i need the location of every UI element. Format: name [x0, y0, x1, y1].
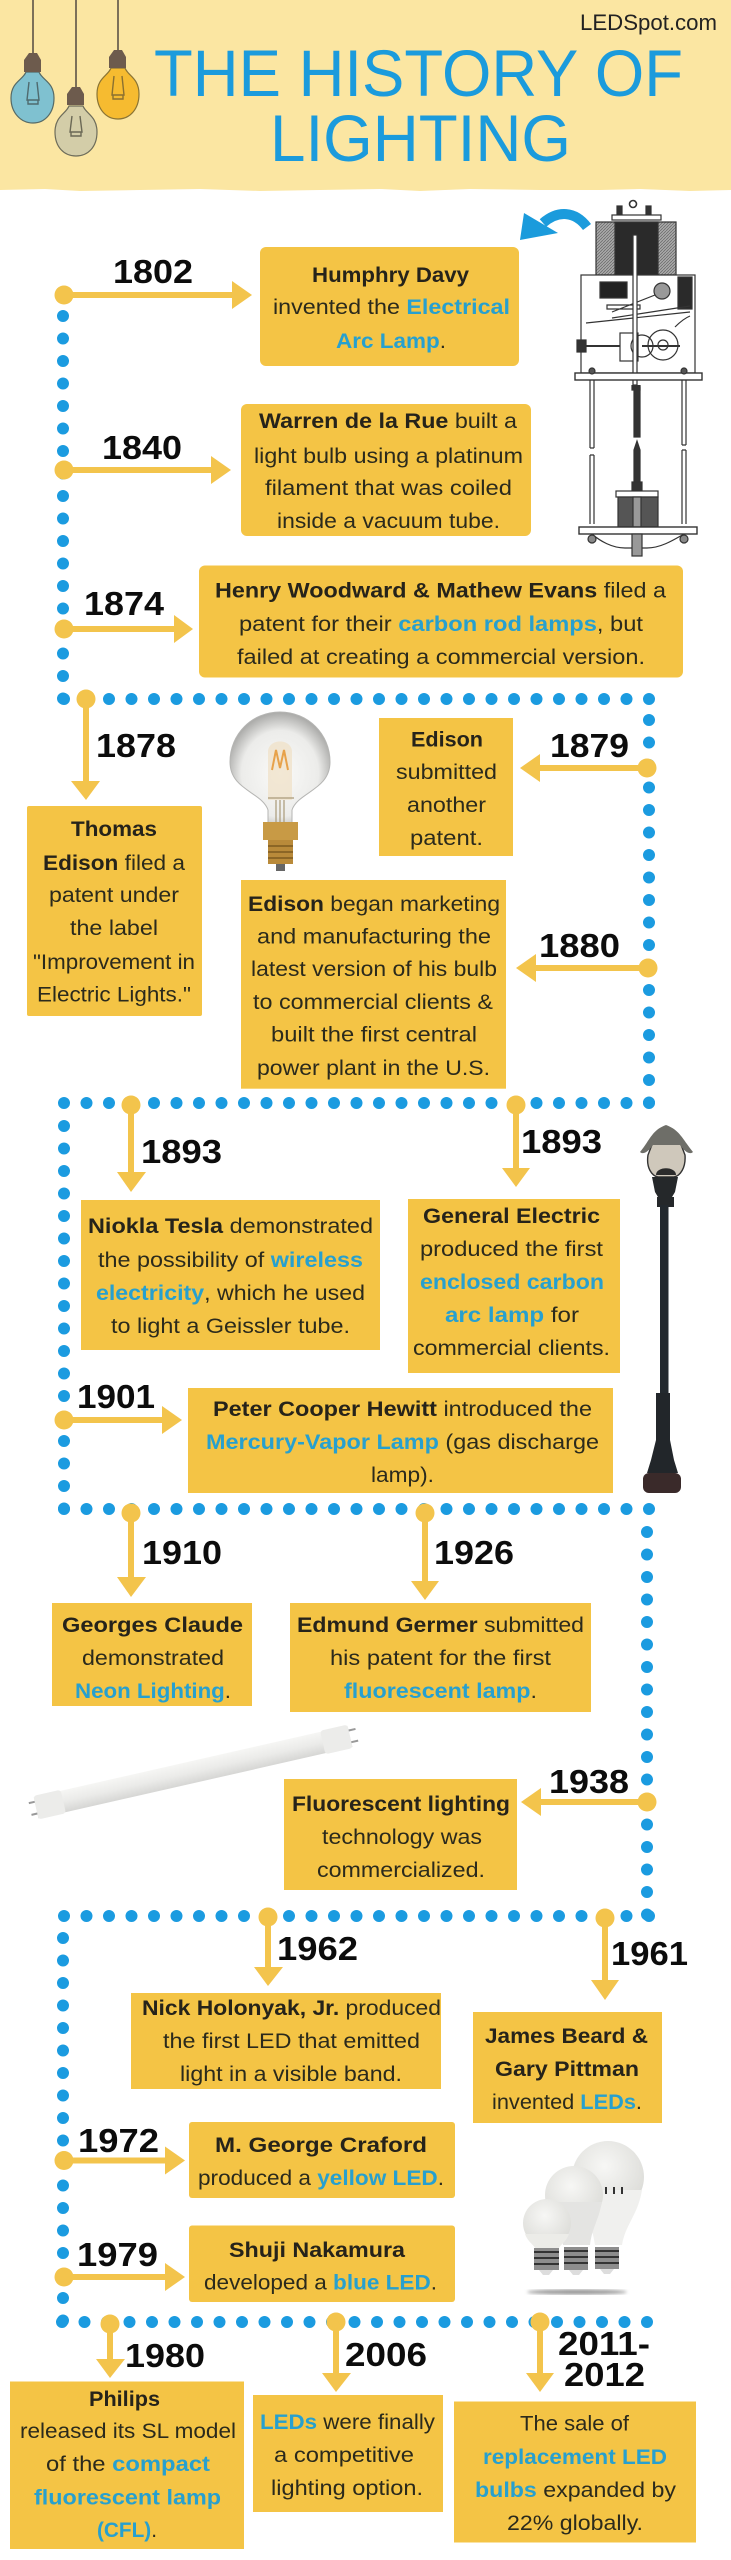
text box: Philips [89, 2388, 160, 2411]
year: 1972 [78, 2122, 159, 2159]
arrow [411, 1504, 439, 1600]
year: 1840 [102, 429, 182, 466]
text box: (CFL). [97, 2519, 157, 2542]
year: 1962 [277, 1930, 358, 1967]
text box: invented LEDs. [492, 2091, 642, 2114]
text box: Arc Lamp . [336, 330, 446, 353]
arrow [54, 2263, 185, 2291]
text box: of the compact [46, 2453, 210, 2476]
event 1840 [54, 404, 531, 536]
text box: Gary Pittman [495, 2058, 639, 2081]
text box: "Improvement in [33, 951, 195, 974]
text box: built the first central [271, 1024, 477, 1046]
text box: bulbs expanded by [475, 2479, 677, 2502]
text box: his patent for the first [330, 1647, 551, 1670]
event 1880 [241, 880, 658, 1089]
year: 1926 [434, 1534, 514, 1571]
title [154, 36, 683, 175]
text box [131, 1993, 441, 2089]
event 1926 [290, 1504, 591, 1712]
text box [284, 1779, 517, 1890]
text box [454, 2402, 696, 2542]
text box: Edmund Germer submitted [297, 1614, 584, 1637]
arrow [71, 690, 100, 800]
title: THE HISTORY OF [154, 36, 683, 110]
arrow [54, 1406, 182, 1434]
arrow [591, 1908, 619, 2000]
year: 1910 [142, 1534, 222, 1571]
text box: Thomas [71, 818, 157, 841]
text box: commercialized. [317, 1859, 485, 1882]
arrow [117, 1504, 146, 1597]
event 1962 [131, 1908, 441, 2089]
text box: Mercury-Vapor Lamp (gas discharge [206, 1431, 599, 1454]
text box [189, 2122, 455, 2198]
text box [253, 2395, 443, 2512]
event 1961 [473, 1908, 688, 2123]
arrow [516, 954, 658, 982]
year: 2006 [345, 2336, 427, 2373]
text box: invented the Electrical [273, 296, 510, 319]
icon: arc lamp apparatus [575, 200, 702, 556]
text box: a competitive [274, 2444, 414, 2467]
year: 2012 [564, 2356, 645, 2393]
arrow [117, 1096, 146, 1192]
year: 1938 [549, 1763, 629, 1800]
text box: to light a Geissler tube. [111, 1315, 350, 1338]
dotted timeline path [62, 316, 650, 2322]
text box: Shuji Nakamura [229, 2239, 405, 2262]
text box: latest version of his bulb [251, 958, 497, 981]
text box: patent under [49, 884, 179, 907]
event 1893 Tesla [81, 1096, 380, 1350]
year: 1880 [539, 927, 620, 964]
year: 1893 [521, 1123, 602, 1160]
arrow [54, 2146, 185, 2174]
header banner [0, 0, 731, 191]
year: 1901 [77, 1378, 155, 1415]
arrow [520, 754, 656, 782]
text box [10, 2382, 244, 2549]
text box: Warren de la Rue built a [259, 410, 517, 433]
icon: blue bulb [11, 0, 54, 123]
text box: Edison began marketing [248, 893, 500, 916]
year: 2011- [558, 2325, 650, 2362]
text box: Neon Lighting . [75, 1680, 231, 1703]
event 1980 [10, 2314, 244, 2549]
text box: the label [70, 917, 158, 940]
text box [52, 1603, 252, 1706]
text box: released its SL model [20, 2420, 236, 2443]
text box: electricity , which he used [96, 1282, 365, 1305]
text box [379, 718, 513, 856]
text box: Henry Woodward & Mathew Evans filed a [215, 580, 666, 602]
event 1938 [284, 1763, 656, 1890]
text box: to commercial clients & [253, 991, 493, 1014]
text box: fluorescent lamp [34, 2486, 221, 2510]
text box: 22% globally. [507, 2512, 643, 2535]
text box [199, 566, 683, 678]
icon: curved blue arrow [520, 213, 587, 240]
text box: demonstrated [82, 1647, 224, 1670]
text box: produced a yellow LED . [198, 2167, 444, 2190]
arrow [322, 2312, 351, 2392]
year: 1980 [125, 2337, 205, 2374]
year: 1874 [84, 585, 165, 622]
text box: lamp). [371, 1464, 434, 1487]
event 1893 General Electric [408, 1096, 620, 1373]
event 1878 [27, 690, 202, 1016]
arrow [521, 1788, 656, 1816]
arrow [54, 615, 193, 643]
text box: LEDs were finally [260, 2411, 436, 2434]
text box [290, 1603, 591, 1712]
medium bulb [545, 2166, 603, 2275]
event 1972 [54, 2122, 455, 2198]
event 1901 [54, 1378, 613, 1493]
text box: light bulb using a platinum [254, 445, 523, 468]
icon: hanging bulbs [11, 0, 139, 156]
text box: failed at creating a commercial version. [237, 646, 645, 669]
text box: the first LED that emitted [163, 2030, 420, 2053]
text box [241, 880, 506, 1089]
text box: arc lamp for [445, 1304, 579, 1327]
icon: grey bulb [55, 0, 97, 156]
small bulb [523, 2199, 571, 2275]
text box: Peter Cooper Hewitt introduced the [213, 1398, 592, 1421]
text box [241, 404, 531, 536]
text box: replacement LED [483, 2446, 667, 2469]
text box [408, 1199, 620, 1373]
event 1910 [52, 1504, 252, 1706]
text box: light in a visible band. [180, 2063, 402, 2086]
year: 1961 [611, 1935, 688, 1972]
text box: technology was [322, 1826, 482, 1849]
text box: M. George Craford [215, 2134, 427, 2157]
text box: Electric Lights." [37, 984, 191, 1006]
text box: developed a blue LED . [204, 2272, 437, 2294]
site name: LEDSpot.com [580, 10, 717, 35]
year: 1893 [141, 1133, 222, 1170]
event 1879 [379, 718, 656, 856]
text box [188, 1388, 613, 1493]
text box: The sale of [520, 2412, 629, 2436]
event 1874 [54, 566, 683, 678]
text box: General Electric [423, 1205, 600, 1228]
text box: Niokla Tesla demonstrated [88, 1215, 373, 1238]
event 1979 [54, 2226, 455, 2302]
title: LIGHTING [270, 101, 571, 175]
text box: Fluorescent lighting [292, 1793, 510, 1816]
text box: Humphry Davy [312, 264, 469, 287]
text box: fluorescent lamp . [344, 1680, 537, 1703]
text box: and manufacturing the [257, 926, 491, 948]
text box [189, 2226, 455, 2302]
text box: patent for their carbon rod lamps , but [239, 613, 643, 636]
year: 1879 [550, 727, 629, 764]
text box: Nick Holonyak, Jr. produced [142, 1997, 441, 2020]
event 2006 [253, 2312, 443, 2512]
arrow [96, 2314, 125, 2378]
year: 1979 [77, 2236, 158, 2273]
text box: another [407, 794, 486, 817]
text box: enclosed carbon [420, 1271, 604, 1294]
text box: power plant in the U.S. [257, 1057, 490, 1080]
year: 1878 [96, 727, 176, 764]
text box: Georges Claude [62, 1614, 243, 1637]
large bulb [572, 2141, 644, 2274]
text box: filament that was coiled [265, 477, 512, 500]
icon: street lamp post [640, 1125, 693, 1493]
text box [27, 806, 202, 1016]
arrow [254, 1908, 283, 1986]
text box: submitted [396, 761, 497, 784]
text box: lighting option. [271, 2477, 423, 2500]
year: 1802 [113, 253, 193, 290]
text box [260, 247, 519, 366]
text box [473, 2012, 662, 2123]
text box: the possibility of wireless [98, 1249, 363, 1272]
arrow [502, 1096, 530, 1187]
text box: patent. [410, 827, 483, 850]
arrow [54, 281, 252, 309]
year [558, 2325, 650, 2393]
text box: produced the first [420, 1238, 603, 1261]
text box: Edison [411, 728, 483, 752]
arrow [54, 456, 231, 484]
icon: fluorescent tube [27, 1723, 359, 1821]
icon: LED bulbs [523, 2141, 644, 2294]
text box [81, 1200, 380, 1350]
text box: Edison filed a [43, 852, 185, 875]
text box: James Beard & [485, 2025, 648, 2048]
text box: commercial clients. [413, 1337, 610, 1360]
text box: inside a vacuum tube. [277, 510, 500, 533]
arrow [526, 2312, 554, 2392]
icon: yellow bulb [97, 0, 139, 119]
event 2011-2012 [454, 2312, 696, 2542]
event 1802 [54, 247, 519, 366]
icon: edison bulb [230, 712, 330, 871]
